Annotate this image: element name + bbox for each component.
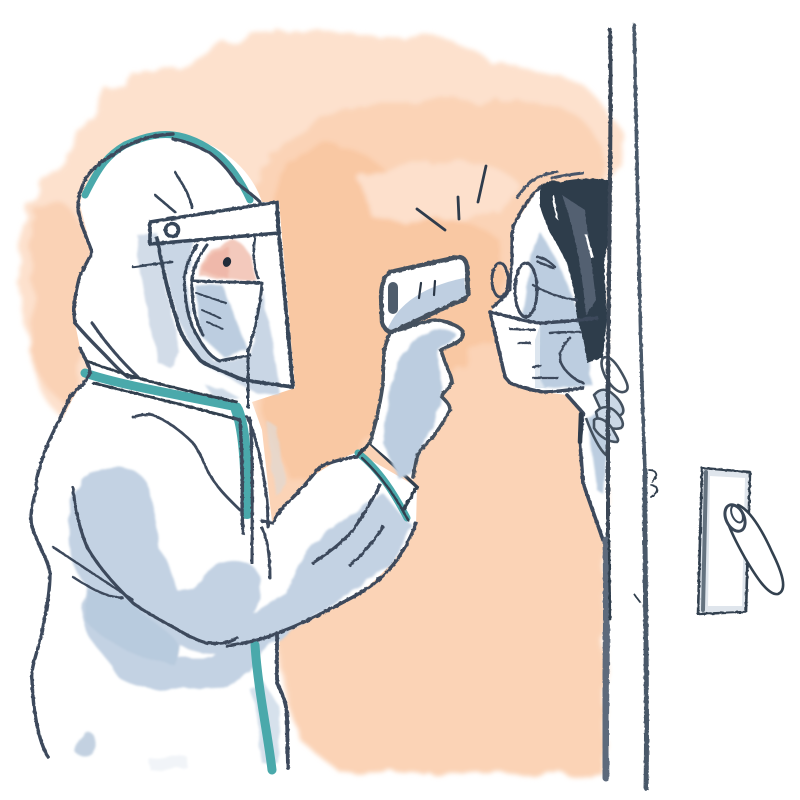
door handle plate (698, 468, 783, 614)
woman: head, glasses, mask (490, 172, 613, 540)
thermometer and glove (370, 257, 468, 480)
woman's hand on door (586, 357, 628, 455)
teal trim (85, 134, 407, 770)
collar and cuff lines (87, 361, 417, 520)
watercolor background: orange wash (19, 30, 622, 775)
hair (517, 172, 610, 363)
protective suit: white body (30, 133, 417, 772)
door edge lines (605, 25, 657, 788)
suit outlines (31, 134, 416, 768)
signal lines from thermometer (417, 166, 486, 230)
suit blue shading (68, 233, 412, 770)
glove (370, 320, 463, 480)
thermometer body (381, 257, 468, 332)
face shield and face (133, 172, 293, 407)
